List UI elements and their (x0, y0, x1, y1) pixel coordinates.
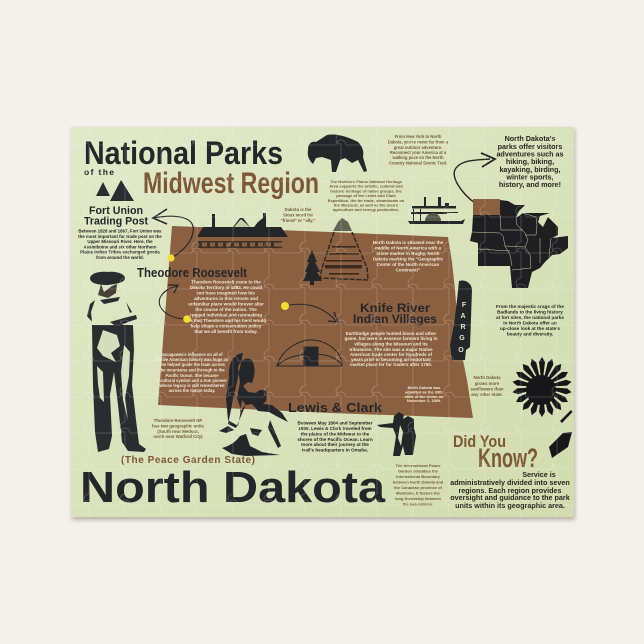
text: Service regions fact: oversight and guidance to the park (450, 493, 570, 502)
text: stone marker description: Center of the North American (377, 262, 440, 267)
text: Knife River description (344, 331, 438, 367)
text: stone marker description: stone marker in Rugby, North (377, 251, 440, 256)
text: North Country trail: From New York to North (395, 134, 442, 139)
text: Fort Union description: Between 1828 and 1867, Fort Union was (78, 228, 162, 234)
text: Fort Union description (78, 228, 162, 260)
heading: Did You Know: Did You (453, 432, 506, 451)
illustration: Lewis and Clark figures (377, 412, 416, 456)
text: Knife River description: Earthlodge people hunted bison and other (346, 331, 436, 336)
subtitle: of the: of the (84, 167, 114, 177)
text: Knife River description: American trade center for hundreds of (350, 352, 433, 357)
icon: tipis (96, 180, 134, 201)
text: Lewis and Clark description: the plains of the Midwest to the (301, 432, 370, 436)
text: Badlands description: in North Dakota offer an (503, 320, 557, 326)
text: Sacagawea description (156, 352, 229, 393)
text: Northern Plains heritage: historic heritage of native groups, the (330, 188, 403, 193)
text: Dakota word meaning: "friend" or "ally." (281, 218, 315, 223)
text: Lewis and Clark description (297, 420, 373, 452)
North Dakota state map (158, 226, 473, 418)
text: Sunflower fact (471, 375, 504, 397)
arrow: Theodore Roosevelt (159, 285, 187, 319)
text: North Country trail: great outdoor adventure. (394, 145, 442, 150)
text: Northern Plains heritage: the Missouri, as well as the area's (334, 202, 399, 208)
text: Dakota word meaning: Dakota is the (285, 207, 312, 212)
text: Lewis and Clark description: more about their journey at the (301, 442, 369, 447)
text: statehood note: admitted as the 39th (405, 390, 443, 394)
text: Sacagawea description: Native American history was huge as (156, 357, 229, 362)
text: Roosevelt description: adventures in this remote and (194, 296, 258, 301)
text: statehood note: November 2, 1889. (407, 398, 441, 403)
text: Visitor adventures callout: North Dakota's (505, 134, 555, 143)
arrow: Fort Union (153, 209, 193, 258)
text: Roosevelt NP units: has two geographic units (152, 424, 205, 428)
heading: Midwest Region: Midwest Region (143, 167, 319, 200)
text: stone marker description: North Dakota is situated near the (373, 240, 444, 245)
text: Badlands description: From the majestic crags of the (496, 304, 564, 309)
heading: Knife River Indian Villages (353, 301, 437, 326)
text: Visitor adventures callout: adventures such as (496, 150, 564, 158)
text: Roosevelt description: rugged individual and rainmaking (190, 312, 262, 318)
title: North Dakota: North Dakota (80, 463, 386, 512)
text: Northern Plains heritage: The Northern Plains National Heritage (330, 179, 403, 184)
text: Fort Union description: Assiniboine and six other Northern (83, 244, 157, 250)
text: Roosevelt description: the course of the nation. The (195, 307, 257, 312)
heading: Did You Know: Know? (478, 443, 538, 473)
arrow: to Midwest map (454, 153, 495, 204)
text: Sacagawea description: Sacagawea's influence on all of (161, 352, 223, 357)
text: North Country trail (388, 134, 449, 166)
text: Service regions fact: Service is (522, 470, 556, 479)
heading: Theodore Roosevelt: Theodore Roosevelt (137, 266, 248, 280)
text: Sacagawea description: the mountains and through to the (159, 368, 225, 372)
heading: Fort Union Trading Post: Trading Post (84, 216, 148, 228)
text: statehood note: state of the Union on (405, 394, 444, 399)
text: Roosevelt NP units: north near Watford City) (153, 434, 203, 439)
text: Roosevelt description (186, 280, 266, 334)
text: International Peace Garden: Garden straddles the (398, 468, 439, 474)
subtitle: The Peace Garden State: (The Peace Garden State) (121, 455, 255, 466)
icon: pine tree (303, 250, 322, 285)
text: Service regions fact: administratively divided into seven (450, 478, 570, 487)
text: International Peace Garden: the two nations. (403, 502, 433, 506)
icon: historic building skyline (197, 213, 288, 248)
heading: Fort Union Trading Post: Fort Union (89, 205, 143, 217)
text: Fort Union description: the most important fur trade post on the (78, 234, 162, 239)
text: Roosevelt description: unfamiliar place would forever alter (188, 302, 264, 306)
text: Badlands description: up-close look at the state's (500, 326, 560, 331)
puzzle background board (71, 127, 575, 520)
text: International Peace Garden: the Canadian province of (394, 485, 443, 490)
icon: Fargo sign: R (460, 324, 466, 331)
heading: Knife River Indian Villages: Indian Villages (353, 312, 437, 326)
text: Visitor adventures callout: hiking, biking, (506, 157, 554, 166)
marker: Knife River (281, 302, 289, 310)
puzzle piece texture (71, 127, 574, 517)
arrow: Knife River (289, 304, 338, 322)
text: statehood note: North Dakota was (408, 385, 440, 390)
icon: Fargo sign: A (460, 313, 466, 320)
text: Roosevelt description: help shape a conservation policy (191, 324, 262, 328)
text: Roosevelt NP units (152, 418, 205, 439)
text: Northern Plains heritage: passage of the Lewis and Clark (336, 193, 397, 198)
text: Dakota word meaning: Sioux word for (283, 212, 313, 218)
text: Sunflower fact: any other state. (471, 392, 503, 397)
text: North Country trail: Country National Scenic Trail. (389, 160, 447, 166)
text: stone marker description: Dakota marking the "Geographic (373, 256, 444, 262)
text: North Country trail: walking pace on the North (392, 155, 444, 160)
text: Sacagawea description: across the nation today. (169, 388, 215, 393)
title: National Parks: National Parks (84, 135, 283, 171)
text: Roosevelt NP units: (South near Medora, (157, 429, 199, 434)
icon: bison (308, 135, 367, 172)
text: North Country trail: Reconnect your America at a (390, 150, 447, 155)
illustration: Roosevelt figure (87, 272, 146, 452)
text: International Peace Garden: between North Dakota and (393, 480, 444, 484)
text: Lewis and Clark description: 1806, Lewis & Clark traveled from (298, 426, 372, 431)
text: Badlands description: Badlands to the living history (497, 310, 563, 314)
heading: Fort Union Trading Post (84, 205, 148, 228)
text: Service regions fact: regions. Each region provides (458, 486, 562, 495)
icon: Fargo sign: F (462, 302, 467, 309)
illustration: Geographic center cairn and tree (303, 218, 368, 285)
text: Knife River description: game, but were in essence farmers living in (344, 336, 438, 341)
text: Sunflower fact: North Dakota (474, 375, 501, 380)
text: Visitor adventures callout (496, 134, 564, 189)
text: Service regions fact (450, 470, 570, 510)
text: Roosevelt description: not have imagined how his (197, 290, 255, 296)
text: Sunflower fact: sunflowers than (471, 386, 504, 392)
text: Roosevelt description: Dakota Territory in 1883. He could (190, 285, 262, 290)
text: Knife River description: years prior to becoming an important (351, 357, 431, 362)
text: Visitor adventures callout: kayaking, birding, (499, 165, 561, 174)
text: International Peace Garden (393, 463, 444, 506)
text: Roosevelt description: life that Theodore and his herd would (186, 318, 266, 323)
text: Badlands description: at fort sites, the national parks (496, 315, 564, 320)
text: Northern Plains heritage: agriculture and energy production. (333, 207, 399, 212)
text: Badlands description (496, 304, 564, 336)
map: Midwest states (470, 199, 568, 288)
heading: Lewis and Clark: Lewis & Clark (288, 401, 382, 415)
text: stone marker description (373, 240, 444, 272)
text: Knife River description: market place for fur traders after 1750. (350, 362, 432, 367)
text: Lewis and Clark description: Between May 1804 and September (297, 420, 373, 426)
text: Sacagawea description: whose legacy is still remembered (158, 383, 225, 388)
text: Sacagawea description: Pacific Ocean. She became (165, 373, 219, 378)
text: International Peace Garden: long friendship between (395, 496, 442, 501)
text: Dakota word meaning (281, 207, 315, 223)
text: Fort Union description: Plains Indian Tribes exchanged goods (80, 250, 160, 254)
heading: Knife River Indian Villages: Knife River (360, 301, 430, 315)
text: Sunflower fact: grows more (475, 381, 500, 386)
text: Northern Plains heritage (328, 179, 405, 212)
text: Sacagawea description: a cultural symbol and a true pioneer (157, 378, 228, 383)
icon: steamboat (408, 197, 465, 224)
heading: Did You Know (453, 432, 538, 473)
text: International Peace Garden: International Boundary (396, 474, 441, 479)
text: North Country trail: Dakota, you're never far from a (388, 140, 449, 144)
icon: sunflower (512, 357, 572, 458)
text: Roosevelt description: Theodore Roosevelt came to the (191, 280, 261, 284)
marker: Fort Union (167, 254, 175, 262)
text: Northern Plains heritage: Area supports the artistic, cultural and (329, 184, 403, 189)
text: stone marker description: Continent!" (396, 268, 420, 272)
text: Knife River description: tributaries. The site was a major Native (349, 347, 433, 352)
icon: Fargo sign (450, 281, 472, 360)
text: Visitor adventures callout: history, and more! (499, 180, 561, 189)
text: Lewis and Clark description: shores of the Pacific Ocean. Learn (297, 437, 373, 442)
text: stone marker description: middle of North America with a (375, 246, 442, 250)
text: Lewis and Clark description: trail's headquarters in Omaha. (302, 448, 368, 452)
text: Badlands description: beauty and diversity. (507, 332, 553, 336)
text: Sacagawea description: she helped guide the team across (159, 362, 226, 367)
illustration: earth lodge (277, 340, 342, 366)
text: Knife River description: villages along the Missouri and its (354, 342, 428, 346)
illustration: Sacagawea and child (219, 353, 288, 456)
text: Roosevelt NP units: Theodore Roosevelt NP (154, 418, 202, 423)
text: International Peace Garden: Manitoba. It fosters the (396, 490, 441, 496)
text: Roosevelt description: that we all benefit from today. (194, 329, 258, 334)
text: Visitor adventures callout: winter sports, (505, 172, 554, 182)
text: Northern Plains heritage: Expedition, the fur trade, steamboats on (328, 198, 405, 203)
text: Fort Union description: from around the world. (96, 255, 144, 260)
text: Fort Union description: Upper Missouri River. Here, the (87, 239, 153, 244)
text: International Peace Garden: The International Peace (396, 463, 441, 468)
text: Service regions fact: units within its geographic area. (455, 501, 565, 510)
text: statehood note (405, 385, 444, 403)
icon: Fargo sign: G (459, 335, 465, 342)
icon: Fargo sign: O (458, 347, 464, 354)
text: Visitor adventures callout: parks offer visitors (498, 142, 562, 151)
marker: Theodore Roosevelt (183, 315, 191, 323)
